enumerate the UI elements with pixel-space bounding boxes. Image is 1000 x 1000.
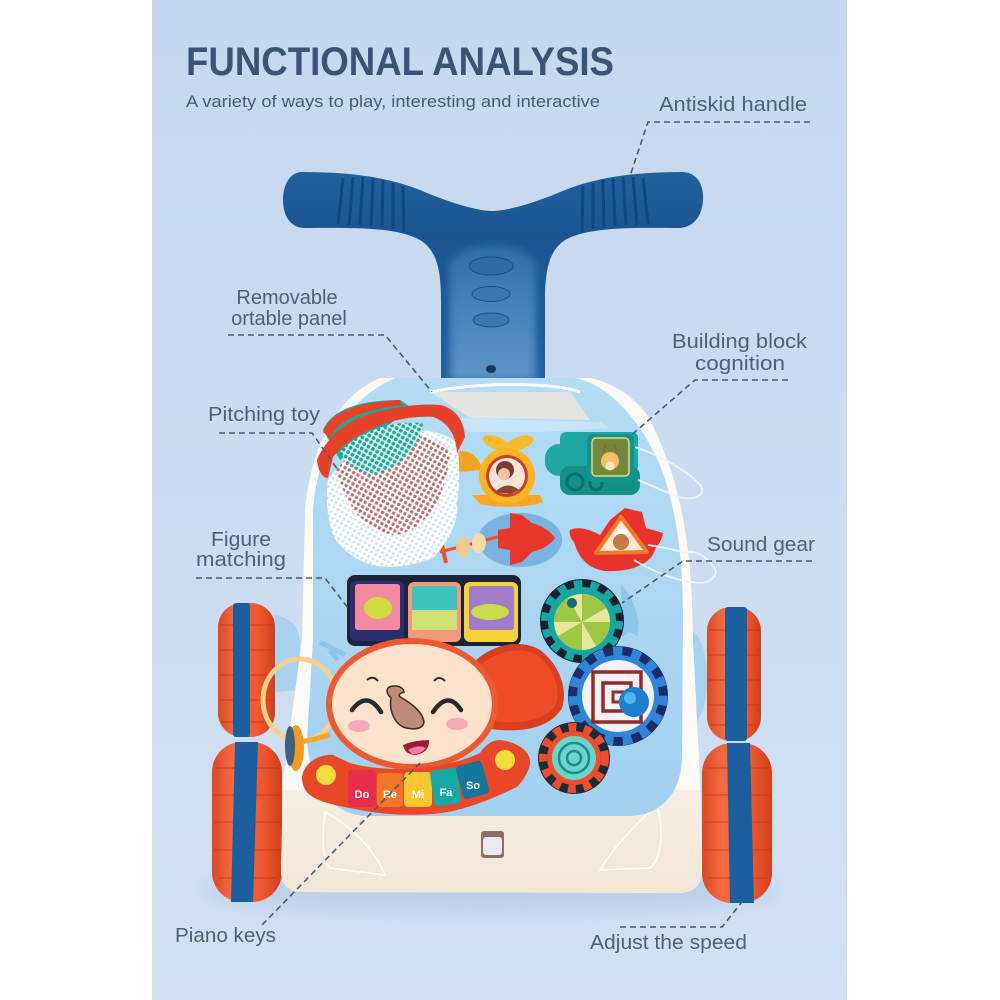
callout: sound gear: Sound gear	[707, 534, 815, 556]
basketball hoop and net	[317, 400, 465, 567]
callout: building block cognition	[628, 331, 808, 438]
callout: figure matching: matching	[196, 549, 286, 571]
piano keys: Mi	[412, 789, 424, 801]
callout: pitching toy	[208, 404, 338, 470]
wheel: back right	[684, 607, 761, 741]
blue play panel	[307, 378, 683, 816]
callout: adjust the speed	[590, 898, 747, 954]
building block toy	[545, 432, 640, 495]
boat toy	[570, 508, 663, 571]
helicopter toy	[457, 432, 543, 507]
floor shadow	[200, 868, 780, 912]
wheel: front left	[212, 742, 282, 902]
callout: antiskid handle	[630, 94, 810, 176]
callout: building block cognition: Building block	[672, 331, 808, 353]
piano keys: So	[466, 780, 480, 792]
handle	[283, 172, 703, 380]
elephant face and ear	[326, 638, 564, 770]
figure matching cards	[347, 575, 521, 646]
shape gear: red	[538, 722, 610, 794]
title: FUNCTIONAL ANALYSIS	[186, 40, 614, 84]
piano keys: Do	[355, 789, 370, 801]
piano keys	[302, 740, 530, 815]
subtitle: A variety of ways to play, interesting and interactive	[186, 93, 600, 111]
callout: antiskid handle: Antiskid handle	[659, 94, 807, 116]
product: baby walker	[200, 172, 780, 912]
piano keys: Fa	[440, 787, 453, 799]
wheel: front right	[702, 743, 772, 903]
wire loops	[634, 447, 716, 583]
callout: figure matching: Figure	[211, 529, 271, 551]
shape gear: green	[540, 579, 624, 663]
callout: piano keys	[175, 763, 420, 947]
cream base	[281, 378, 702, 893]
callout: adjust the speed: Adjust the speed	[590, 932, 747, 954]
callout: removable portable panel: Removable	[236, 287, 338, 309]
callout: sound gear	[622, 534, 815, 603]
callout: pitching toy: Pitching toy	[208, 404, 320, 426]
piano keys: Re	[383, 789, 397, 801]
callout: piano keys: Piano keys	[175, 925, 276, 947]
callout: building block cognition: cognition	[695, 353, 785, 375]
background panel	[152, 0, 847, 1000]
wheel: back left	[218, 603, 300, 737]
callout: removable portable panel: ortable panel	[231, 308, 347, 330]
callout: figure matching	[196, 529, 348, 608]
shape gear: blue	[568, 646, 668, 746]
callout: removable portable panel	[228, 287, 432, 392]
pull ring toy	[263, 659, 337, 771]
rocket toy with abacus	[440, 513, 562, 567]
